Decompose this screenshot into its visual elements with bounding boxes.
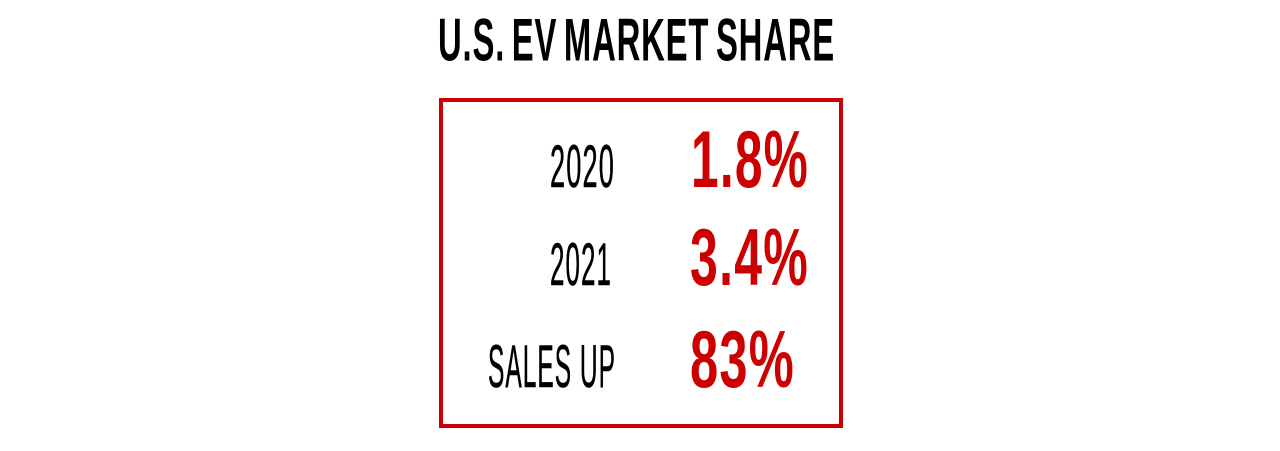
value: 2021 share: 3.4%	[690, 213, 809, 303]
infographic: 2021	[550, 231, 612, 298]
infographic: SALES UP	[488, 333, 616, 400]
value: 2020 share: 1.8%	[691, 115, 809, 205]
panel: market share box	[441, 100, 841, 426]
infographic: 2020	[550, 133, 615, 200]
value: sales increase: 83%	[690, 315, 795, 405]
title: U.S. EV MARKET SHARE	[438, 6, 835, 74]
